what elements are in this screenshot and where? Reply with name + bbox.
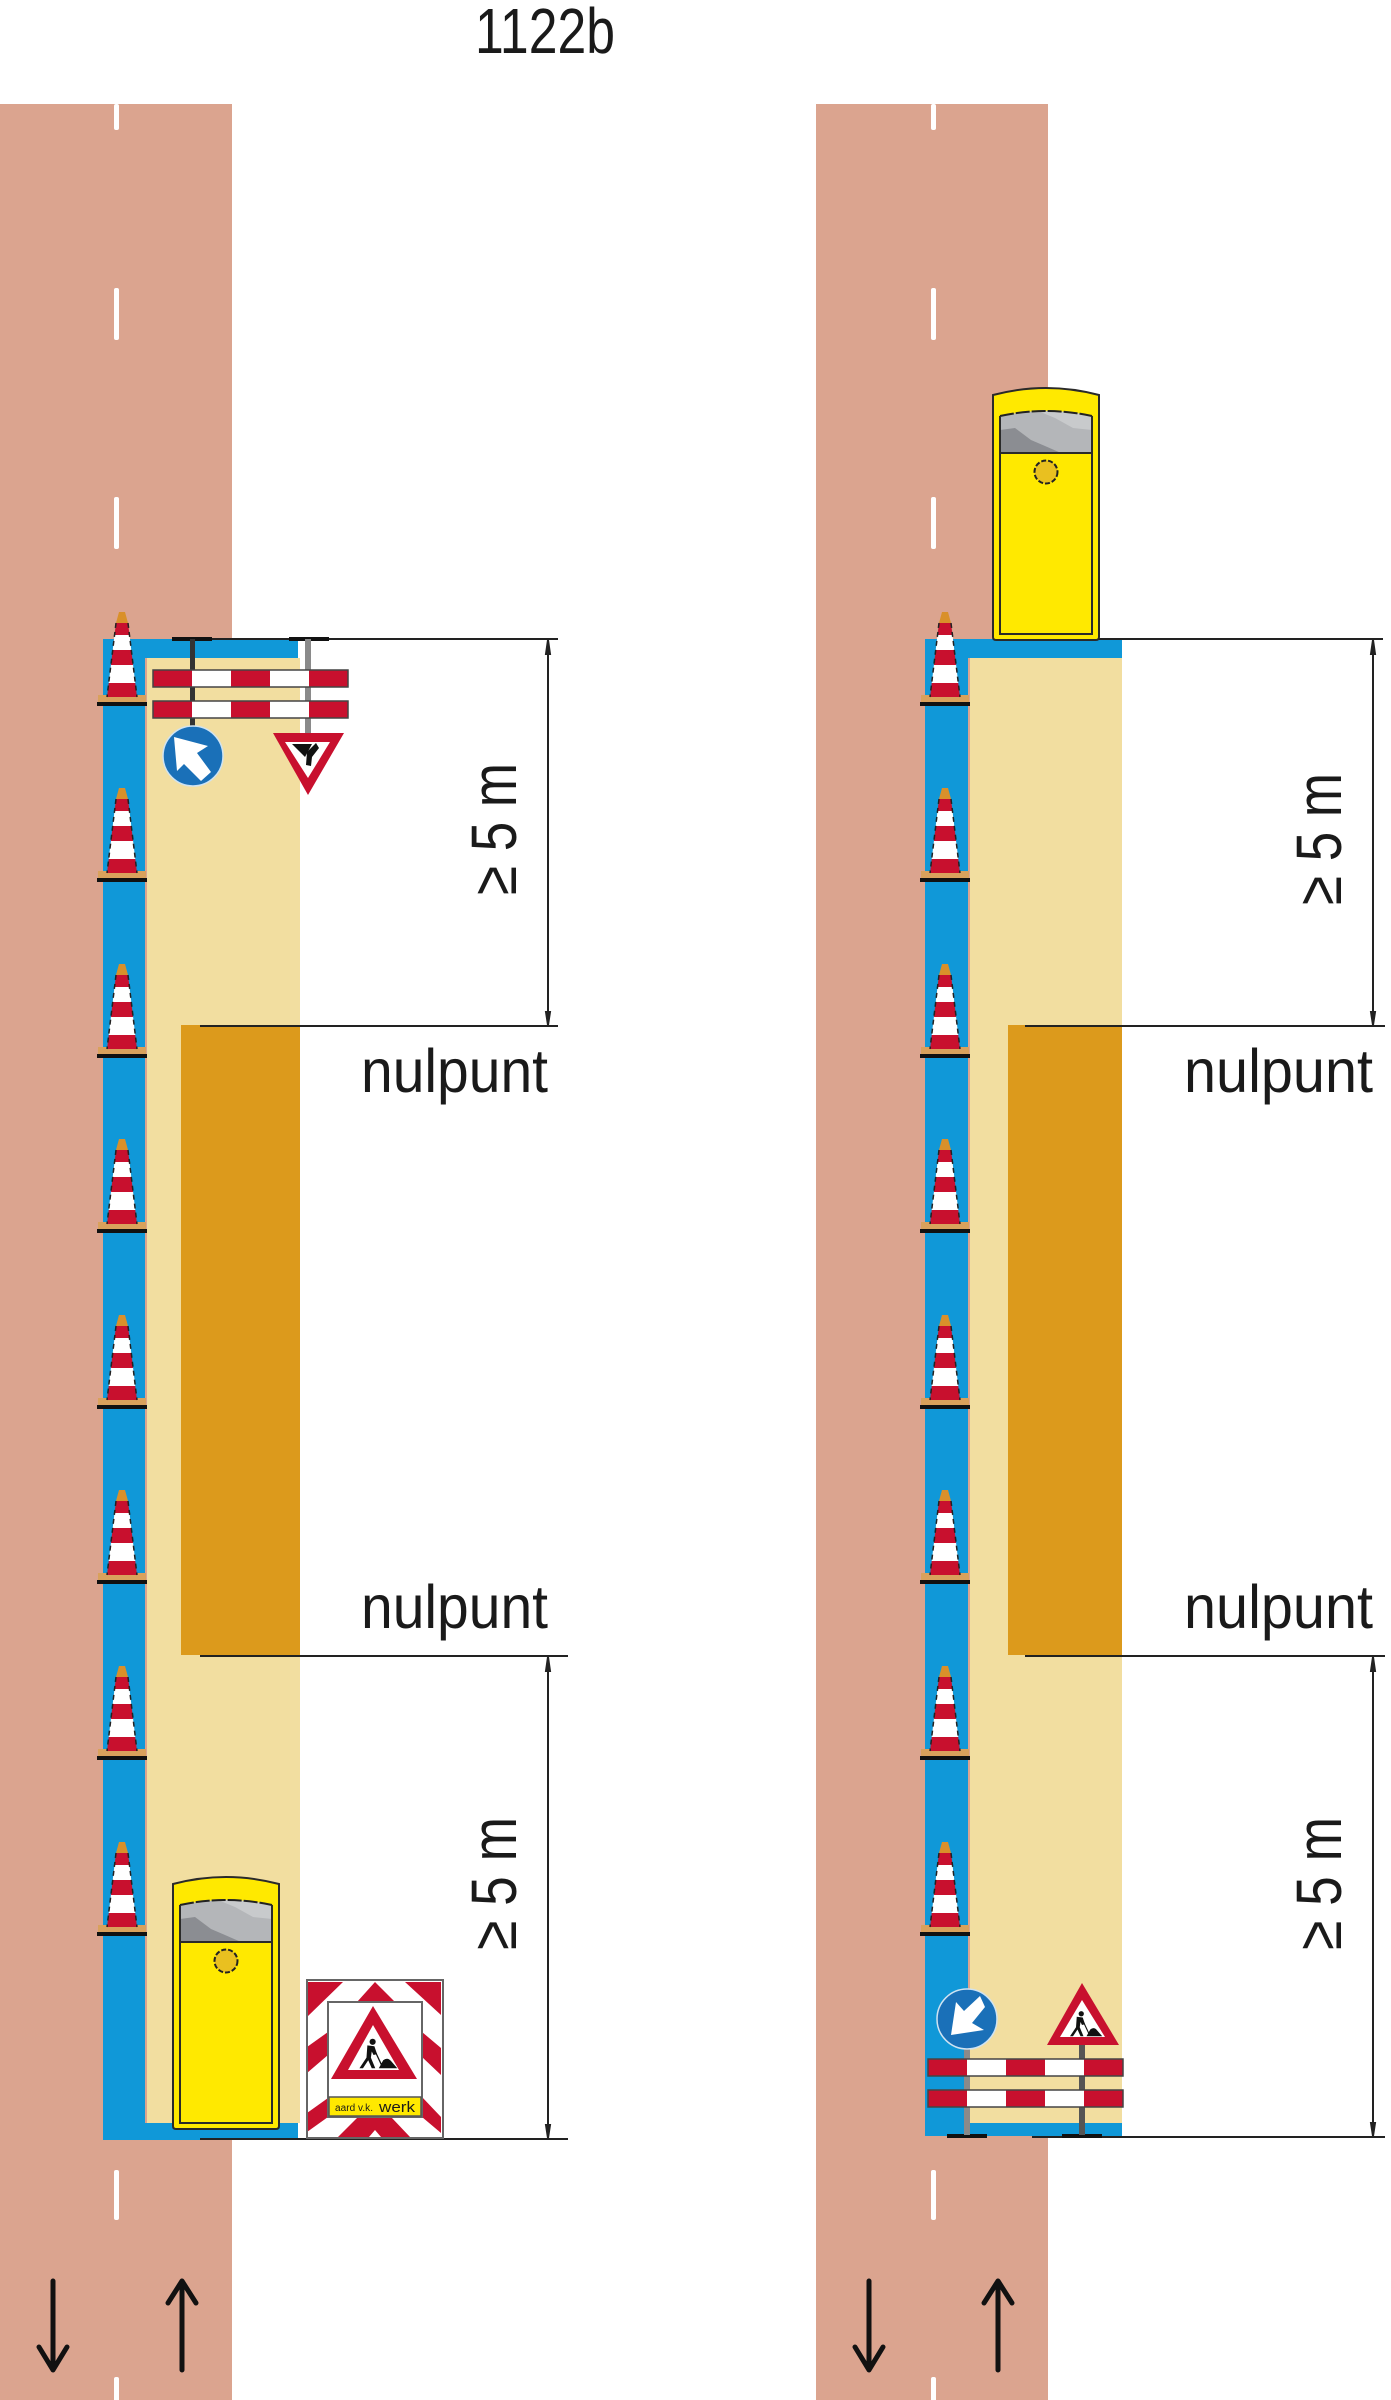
arrows: left road directions	[39, 2281, 196, 2370]
sign: inverted triangle	[273, 733, 344, 795]
blue safety zone	[103, 639, 298, 2140]
cones: right column	[920, 612, 970, 1936]
road: right	[816, 104, 1048, 2400]
plate: type of work: aard v.k.	[335, 2103, 373, 2114]
lane dashes: left road	[114, 104, 119, 2400]
road: left	[0, 104, 232, 2400]
label: nulpunt top left: nulpunt	[361, 1037, 548, 1105]
sign: blue keep-direction arrow	[937, 1989, 997, 2049]
sign: road works triangle	[1047, 1983, 1119, 2045]
label: nulpunt bottom left: nulpunt	[361, 1573, 548, 1641]
beige work area	[147, 658, 300, 2123]
label: distance top right: ≥ 5 m	[1283, 773, 1355, 905]
label: distance top left: ≥ 5 m	[458, 763, 530, 895]
label: distance bottom left: ≥ 5 m	[458, 1817, 530, 1950]
blue safety zone right	[925, 639, 1122, 2136]
cones: left column	[97, 612, 147, 1936]
label: nulpunt top right: nulpunt	[1184, 1037, 1373, 1105]
beige work area right	[970, 658, 1122, 2123]
panel: right work zone	[925, 639, 1122, 2136]
arrows: right road directions	[855, 2281, 1012, 2370]
vehicle: left	[173, 1877, 279, 2129]
dimension lines: right	[1025, 639, 1385, 2137]
label: distance bottom right: ≥ 5 m	[1283, 1817, 1355, 1950]
panel: left work zone	[103, 639, 300, 2140]
label: nulpunt bottom right: nulpunt	[1184, 1573, 1373, 1641]
plate: type of work: werk	[378, 2099, 416, 2116]
sign: blue keep-direction arrow	[163, 726, 223, 786]
sign board: left	[307, 1980, 443, 2138]
plate: type of work	[329, 2097, 421, 2116]
brown excavation right	[1008, 1025, 1122, 1655]
barrier with signs: top left	[153, 637, 348, 795]
lane dashes: right road	[931, 104, 936, 2400]
dimension lines: left	[172, 639, 568, 2139]
vehicle: right	[993, 388, 1099, 640]
brown excavation	[181, 1025, 300, 1655]
barrier with signs: bottom right	[928, 1983, 1123, 2138]
sign: road works triangle	[331, 2006, 417, 2079]
